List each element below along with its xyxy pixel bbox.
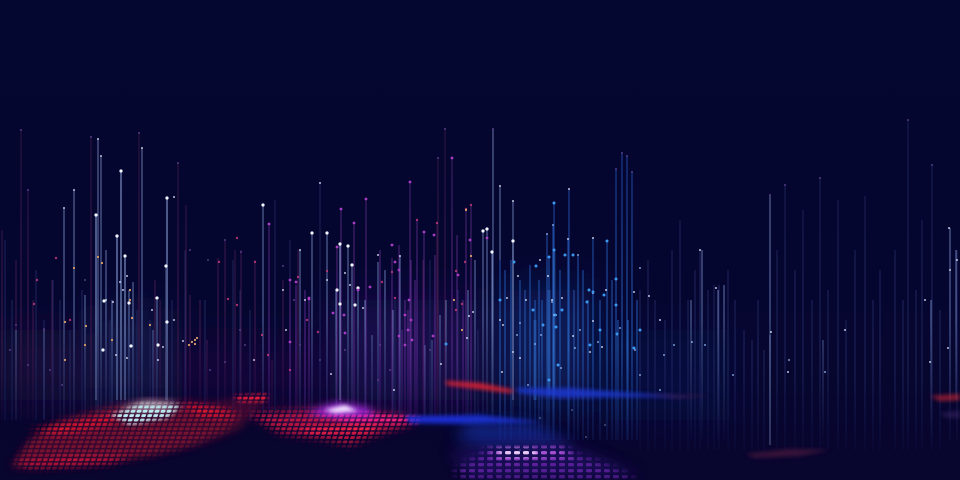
magenta peak [306,403,378,417]
upper blue band [515,388,690,398]
red mesh surface [12,394,268,468]
blue lines [500,153,637,440]
soft red underglow [10,396,270,468]
bright pale lines [16,129,956,445]
upper red streak [445,381,515,393]
purple and red lines [2,129,445,420]
mesh terrain: right faint patches [640,394,960,458]
amber dots [65,210,471,360]
white peak glow [118,401,178,410]
blue dots [446,203,640,380]
magenta and purple dots [269,158,487,345]
mesh terrain: centre magenta ridge [245,403,420,446]
mesh terrain: purple foreground [450,442,640,480]
dim background lines [5,120,957,450]
mesh terrain: left red hill [10,394,270,468]
lower blue field [455,420,575,447]
data point dots [10,120,957,450]
mesh terrain: blue bands [405,381,690,447]
glow behind the lines [0,290,730,420]
white peak [324,405,358,413]
ridge glow [260,406,420,430]
illustration: data landscape [0,119,960,480]
centre blue band [405,415,540,424]
vertical light lines [2,120,957,450]
white peak mesh [110,404,182,425]
faint dots [10,120,932,385]
white dots [96,171,513,350]
